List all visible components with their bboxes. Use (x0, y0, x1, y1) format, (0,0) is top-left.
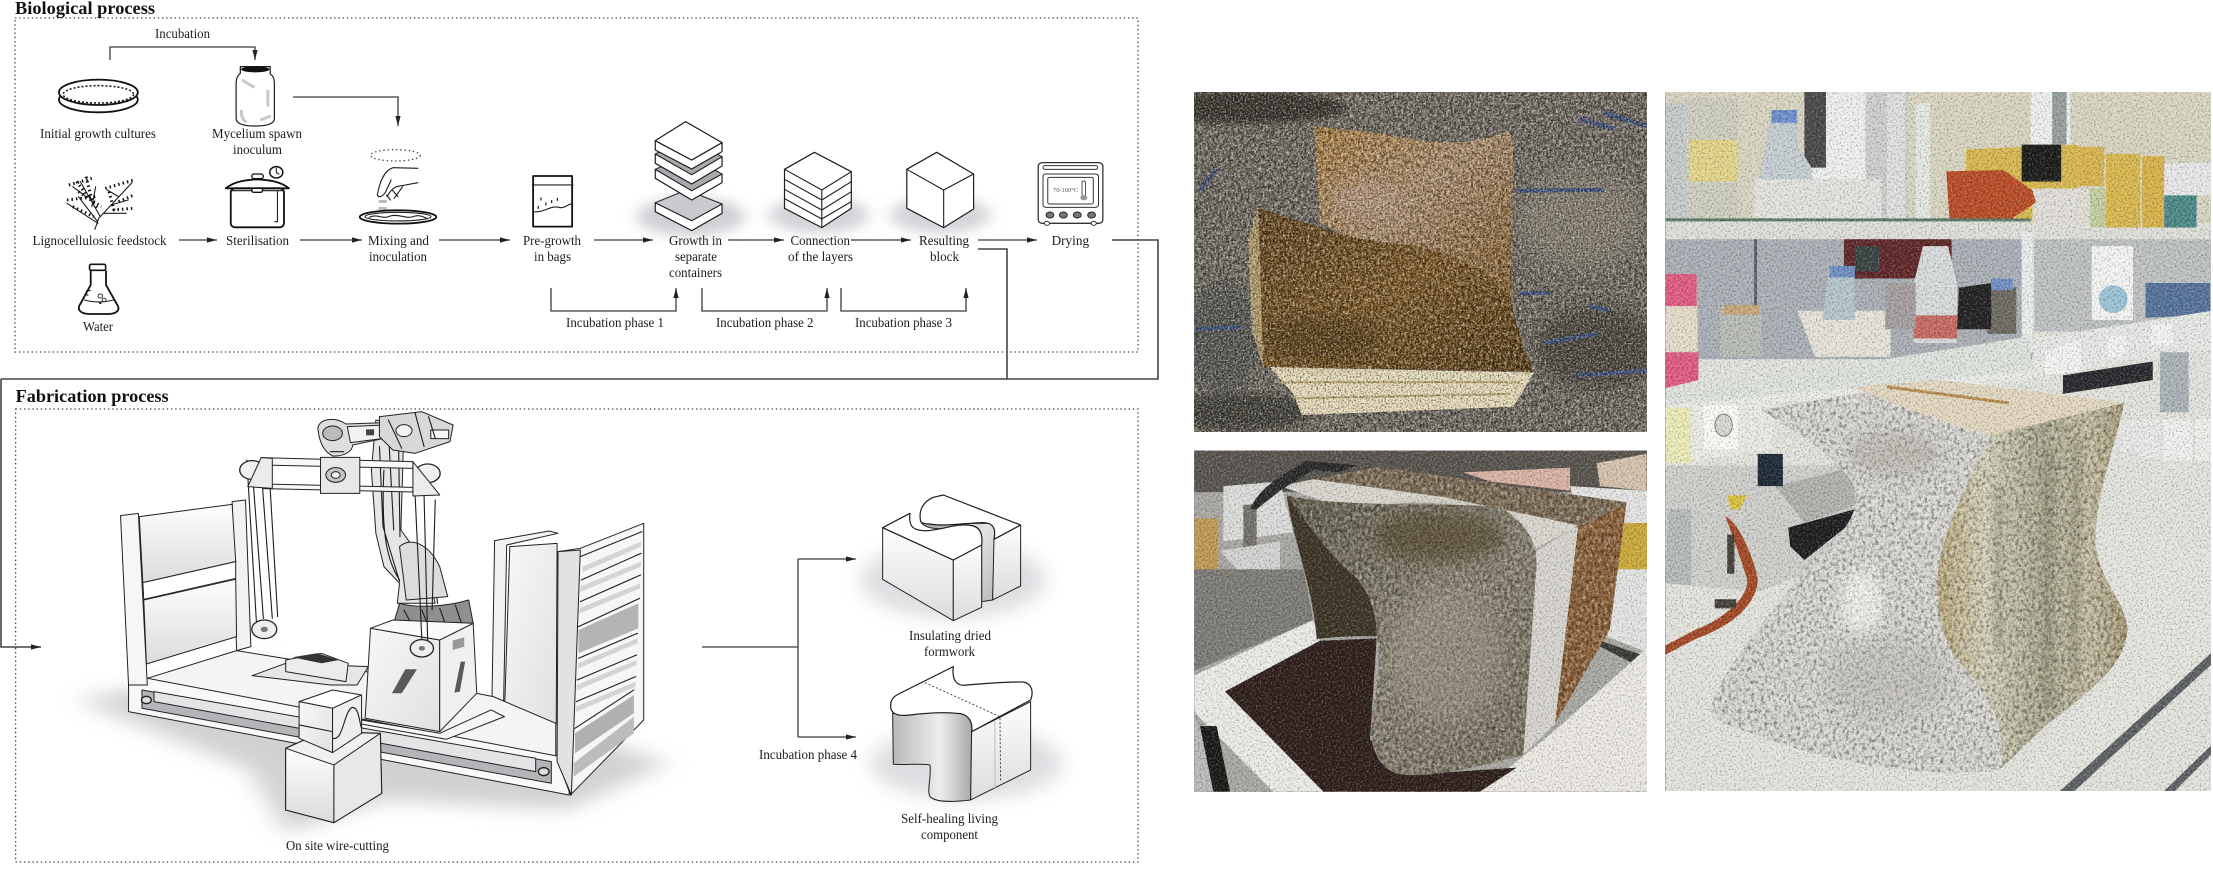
process labels: Mixing and (368, 233, 429, 248)
fabrication labels: Self-healing living (901, 811, 998, 826)
process labels: Incubation (155, 26, 210, 41)
process labels: Initial growth cultures (40, 126, 156, 141)
illustration: insulating dried formwork (860, 495, 1047, 621)
process labels: Incubation phase 3 (855, 315, 952, 330)
icon: sterilisation pot (226, 167, 289, 227)
step shadows under the layered blocks (637, 197, 990, 236)
shelf bands (1665, 221, 2212, 239)
process labels: Growth in (669, 233, 722, 248)
mycelium block (1711, 380, 2124, 772)
right louvre frame (557, 523, 644, 795)
front rail (129, 678, 569, 795)
arrows: main process row (179, 239, 1037, 241)
process labels: block (930, 249, 959, 264)
panel: biological process (15, 0, 1138, 352)
process labels: Resulting (919, 233, 969, 248)
upper frame beams (248, 458, 440, 496)
process labels: Incubation phase 2 (716, 315, 814, 330)
fabrication labels: formwork (924, 644, 975, 659)
fabrication labels (286, 628, 998, 853)
photo: concrete and mycelium component (1194, 451, 1648, 792)
icon: stacked separate layers (655, 122, 722, 231)
fabrication labels: component (921, 827, 978, 842)
process labels: Drying (1052, 233, 1089, 248)
process labels: of the layers (788, 249, 853, 264)
robot arm (318, 412, 473, 627)
icon: mixing hand over plate (360, 150, 436, 224)
mid shelf items (1665, 274, 1698, 388)
panel: fabrication process (16, 386, 1138, 862)
illustration: robotic wire-cutting cell (76, 412, 670, 833)
arrow: jar to mixing (293, 97, 398, 126)
right side jars (2120, 419, 2211, 461)
process labels: separate (675, 249, 717, 264)
icon: lignocellulosic plant (67, 177, 134, 229)
process labels: Water (83, 319, 113, 334)
pulley frame columns (240, 460, 440, 639)
process labels: containers (669, 265, 722, 280)
robot head (318, 419, 384, 456)
process labels: Mycelium spawn (212, 126, 302, 141)
lab wall (1665, 92, 2212, 223)
floor shadow (76, 663, 670, 833)
lower shelf and sockets (1665, 336, 2031, 405)
left wall (121, 500, 251, 685)
process labels: inoculum (233, 142, 282, 157)
robot pedestal (357, 620, 504, 739)
icon: pre-growth bag (532, 176, 573, 227)
icon: resulting block (907, 152, 974, 228)
process labels: Pre-growth (523, 233, 581, 248)
fabrication labels: Incubation phase 4 (759, 747, 857, 762)
arrow: incubation to jar (110, 47, 255, 60)
illustration: self-healing living component (870, 667, 1063, 801)
icon: petri dish (59, 80, 138, 112)
mid back panels (1665, 239, 2032, 359)
floor platform (147, 651, 556, 763)
heading: fabrication process: Fabrication process (16, 386, 169, 406)
process labels: in bags (534, 249, 571, 264)
photo: white mycelium block in laboratory (1665, 92, 2212, 793)
top shelf items (1688, 98, 1738, 218)
oven temperature text: 70-100°C (1053, 187, 1078, 194)
machine on the floor (252, 653, 368, 685)
icon: drying oven (1038, 163, 1103, 225)
fabrication labels: On site wire-cutting (286, 838, 389, 853)
icon: water flask (79, 264, 118, 314)
process labels: Incubation phase 1 (566, 315, 664, 330)
right pulley column (410, 496, 435, 657)
central mount plate (321, 457, 360, 493)
photo: mycelium block with brown surface (1194, 92, 1647, 432)
right cabinet back (492, 531, 558, 724)
process labels: inoculation (369, 249, 427, 264)
process labels: Lignocellulosic feedstock (32, 233, 167, 248)
counter and lower gear (1665, 465, 1865, 592)
icon: connected layers (785, 152, 851, 228)
fabrication labels: Insulating dried (909, 628, 991, 643)
process labels: Connection (790, 233, 850, 248)
connector: drying and block to fabrication (1, 240, 1158, 647)
cut block on pedestal (286, 690, 382, 823)
arrows: incubation phase brackets (551, 288, 966, 311)
arrow: fork to outcomes (702, 559, 856, 737)
process labels: Sterilisation (226, 233, 289, 248)
process labels (32, 26, 1089, 334)
icon: mycelium jar (236, 66, 274, 126)
